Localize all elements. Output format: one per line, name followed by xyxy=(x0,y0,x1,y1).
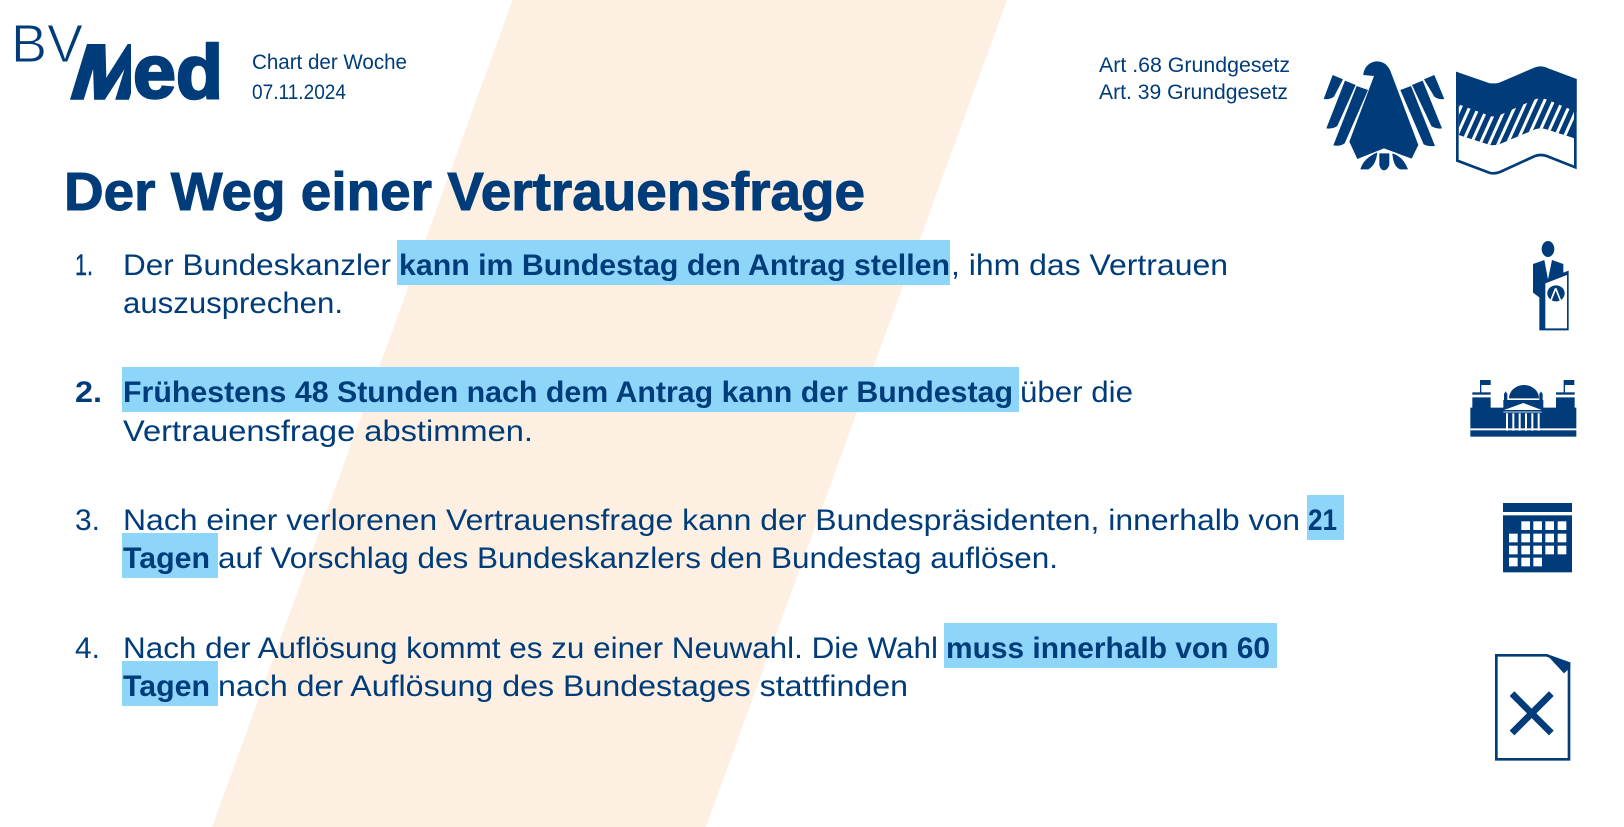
step 1: , ihm das Vertrauen xyxy=(951,249,1228,282)
step 1: auszusprechen. xyxy=(123,287,343,320)
step 4: Nach der Auflösung kommt es zu einer Neuwahl. Die Wahl xyxy=(123,632,938,665)
step 4: nach der Auflösung des Bundestages stattfinden xyxy=(218,670,908,703)
header: legal references xyxy=(1099,54,1290,104)
step 2: Frühestens 48 Stunden nach dem Antrag kann der Bundestag xyxy=(123,376,1013,409)
icon: cancelled document xyxy=(1496,654,1570,759)
header: chart label and date xyxy=(252,51,407,104)
icon: Reichstag building xyxy=(1470,380,1576,437)
step 3: Tagen xyxy=(123,542,210,575)
header: chart label and date: 07.11.2024 xyxy=(252,81,346,104)
icon: speaker at lectern xyxy=(1533,241,1569,330)
logo: BVMed: M xyxy=(62,31,154,115)
step 4 xyxy=(75,623,1277,706)
icon: federal eagle xyxy=(1324,61,1444,170)
step 2: 2. xyxy=(75,376,102,409)
logo: BVMed: BV xyxy=(11,14,83,74)
step 3: 21 xyxy=(1308,504,1337,537)
icon: calendar xyxy=(1503,503,1572,572)
step 3: Nach einer verlorenen Vertrauensfrage kann der Bundespräsidenten, innerhalb von xyxy=(123,504,1300,537)
step 2: Vertrauensfrage abstimmen. xyxy=(123,415,533,448)
step 4: Tagen xyxy=(123,670,210,703)
diagonal background band xyxy=(212,0,1007,827)
step 2 xyxy=(75,367,1133,448)
header: chart label and date: Chart der Woche xyxy=(252,51,407,74)
step 4: 4. xyxy=(75,632,100,665)
step 1: 1. xyxy=(75,249,93,282)
step 3: auf Vorschlag des Bundeskanzlers den Bundestag auflösen. xyxy=(218,542,1058,575)
step 1: kann im Bundestag den Antrag stellen xyxy=(399,249,950,282)
step 1: Der Bundeskanzler xyxy=(123,249,391,282)
step 2: über die xyxy=(1020,376,1133,409)
logo: BVMed xyxy=(16,26,220,100)
header: legal references: Art. 39 Grundgesetz xyxy=(1099,81,1288,104)
header: legal references: Art .68 Grundgesetz xyxy=(1099,54,1290,77)
title: Der Weg einer Vertrauensfrage xyxy=(64,162,865,222)
step 3: 3. xyxy=(75,504,100,537)
logo: BVMed: ed xyxy=(133,30,223,115)
step 4: muss innerhalb von 60 xyxy=(946,632,1270,665)
step 3 xyxy=(75,495,1344,578)
step 1 xyxy=(75,240,1228,320)
icon: German flag xyxy=(1456,66,1577,175)
